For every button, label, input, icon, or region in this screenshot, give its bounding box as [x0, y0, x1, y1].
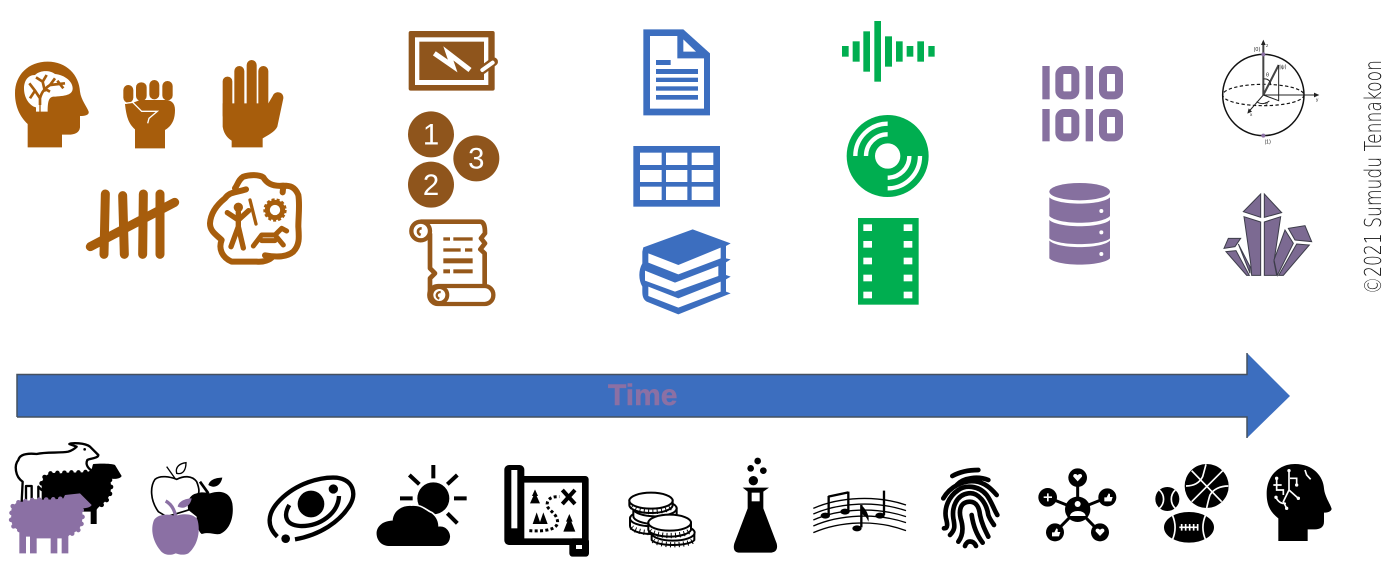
group: brown early data icons — [15, 31, 499, 304]
icon: table — [633, 146, 720, 207]
icon: text document — [643, 29, 710, 115]
icon: head with brain — [15, 62, 89, 147]
icon: film strip — [858, 218, 919, 305]
icon: numbered circles — [408, 111, 499, 208]
icon: galaxy — [270, 478, 353, 543]
icon: apples — [152, 463, 233, 555]
icon: open hand — [223, 60, 283, 147]
icon: binary digits — [1042, 66, 1119, 141]
arrow label: Time — [608, 379, 677, 412]
icon: musical notes on staff — [813, 491, 906, 533]
group: green media icons — [842, 21, 935, 305]
icon: compact disc — [847, 115, 929, 197]
icon: Bloch sphere: |1⟩ — [1265, 140, 1271, 146]
icon: numbered circles: 3 — [468, 143, 484, 176]
group: blue document icons — [633, 29, 731, 314]
icon: Bloch sphere: θ — [1266, 72, 1269, 78]
icon: AI head with circuits — [1267, 464, 1332, 541]
icon: chemistry flask — [734, 458, 777, 553]
icon: database cylinder — [1049, 183, 1110, 265]
icon: chalkboard — [409, 31, 495, 91]
icon: social network — [1038, 468, 1116, 541]
icon: fingerprint — [943, 470, 997, 546]
icon: stack of books — [639, 229, 731, 314]
icon: crystals — [1224, 194, 1312, 275]
icon: sun and cloud — [377, 465, 467, 546]
group: black data source icons — [11, 443, 1332, 557]
group: purple digital icons — [1042, 66, 1312, 275]
icon: Bloch sphere: x — [1250, 112, 1253, 117]
icon: Bloch sphere: φ — [1265, 100, 1268, 105]
icon: cave painting on rock — [210, 175, 299, 262]
icon: Bloch sphere: z — [1266, 43, 1269, 48]
icon: numbered circles: 2 — [423, 169, 439, 202]
icon: treasure map — [504, 465, 589, 557]
icon: tally marks — [90, 194, 175, 254]
icon: sheep — [11, 443, 122, 553]
icon: audio waveform — [842, 21, 935, 82]
icon: paper scroll — [411, 222, 493, 304]
icon: raised fist — [123, 80, 175, 148]
icon: Bloch sphere: |ψ⟩ — [1279, 64, 1287, 70]
icon: Bloch sphere: y — [1316, 97, 1319, 102]
icon: numbered circles: 1 — [423, 118, 439, 151]
icon: coins — [629, 493, 695, 545]
icon: sports balls — [1155, 464, 1229, 543]
time arrow — [17, 353, 1290, 438]
icon: Bloch sphere — [1223, 40, 1319, 146]
icon: Bloch sphere: |0⟩ — [1254, 47, 1260, 53]
